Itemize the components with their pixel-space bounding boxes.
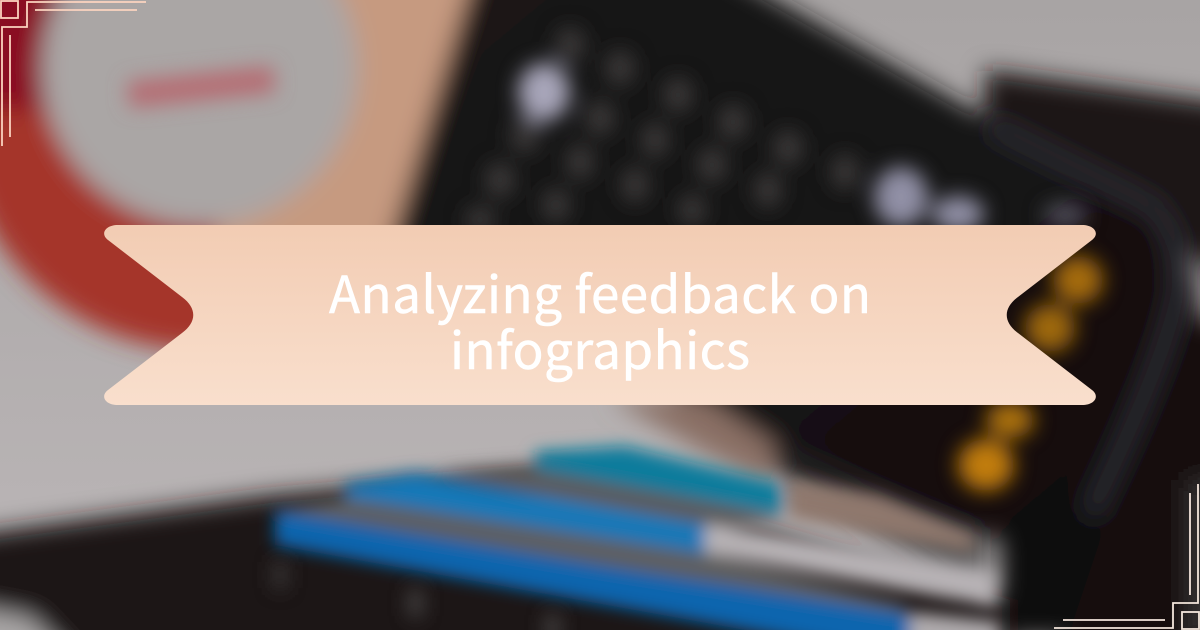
amber keys — [1053, 256, 1103, 304]
white page — [705, 524, 998, 606]
dark device — [385, 0, 1200, 630]
title — [329, 254, 871, 384]
ribbon banner — [104, 225, 1096, 405]
title: infographics — [450, 310, 750, 384]
red ring — [0, 0, 440, 350]
corner ornament: bottom right — [1054, 484, 1199, 629]
red label text blur — [127, 66, 275, 107]
grey page bands — [440, 467, 785, 532]
peach card — [200, 0, 490, 300]
lower dark desk — [0, 470, 1010, 630]
teal tab — [535, 446, 782, 515]
white disc — [42, 0, 358, 226]
dark book lower right — [1060, 320, 1200, 630]
small desk marks — [276, 562, 284, 588]
tan page edge lower — [788, 478, 975, 552]
device bezel — [990, 125, 1178, 515]
title: Analyzing feedback on — [329, 254, 871, 328]
blue tab lower — [275, 510, 910, 630]
light keys — [518, 63, 570, 121]
dark band — [770, 440, 985, 600]
corner ornament: top left — [1, 1, 146, 146]
tan page edge upper — [610, 398, 775, 485]
blue tab middle — [345, 473, 705, 554]
right dark book — [985, 70, 1200, 300]
keypad dots — [465, 27, 859, 234]
